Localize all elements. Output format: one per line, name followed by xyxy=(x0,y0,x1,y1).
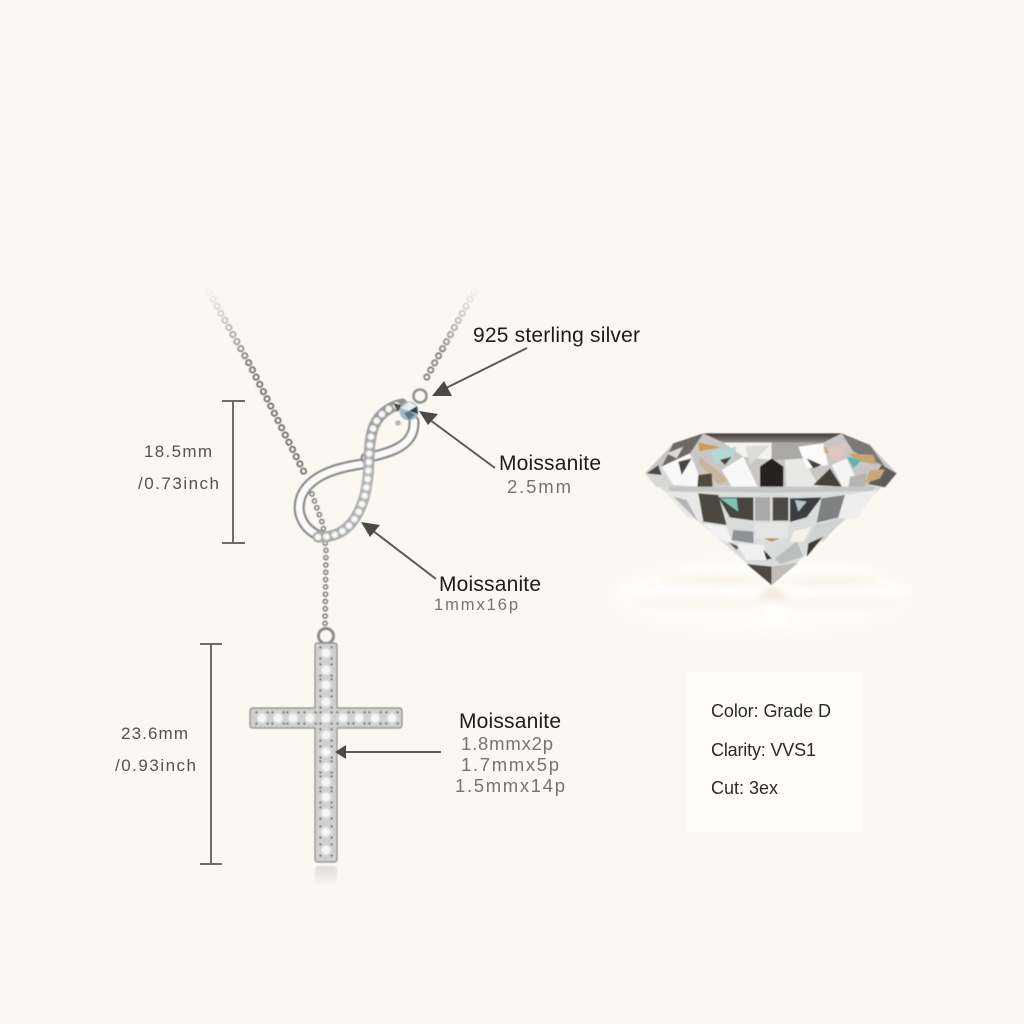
infinity size label xyxy=(138,442,219,493)
dimension bracket: cross height xyxy=(200,644,222,864)
cross size label: 23.6mm xyxy=(121,724,188,743)
pavilion facets xyxy=(665,490,877,585)
infinity size label: /0.73inch xyxy=(138,474,219,493)
label: infinity moissanite: 1mmx16p xyxy=(434,596,518,614)
label: cross moissanite: 1.7mmx5p xyxy=(461,754,559,775)
infinity pendant xyxy=(299,404,414,537)
label: cross moissanite: 1.8mmx2p xyxy=(461,733,553,754)
label: centre moissanite: Moissanite xyxy=(499,452,601,475)
crown base xyxy=(645,433,897,489)
lower chain xyxy=(312,494,326,628)
arrow: infinity stones xyxy=(361,522,436,579)
arrow: centre stone xyxy=(419,411,495,468)
arrow: silver xyxy=(432,348,527,396)
spec panel xyxy=(687,672,862,832)
right chain xyxy=(424,285,478,382)
cross size label: /0.93inch xyxy=(115,756,196,775)
left chain xyxy=(205,285,305,474)
cross size label xyxy=(115,724,196,775)
color grade: Color: Grade D xyxy=(711,701,831,721)
cross reflection xyxy=(315,866,337,886)
label: infinity moissanite: Moissanite xyxy=(439,573,541,596)
diamond xyxy=(645,433,897,585)
moissanite stone band xyxy=(318,404,402,537)
label: cross moissanite: Moissanite xyxy=(459,710,561,733)
cross pendant xyxy=(250,643,402,862)
necklace photo xyxy=(205,285,478,886)
table edge xyxy=(703,433,842,443)
label: cross moissanite xyxy=(455,710,565,796)
diamond reflection xyxy=(615,563,915,631)
label: 925 sterling silver: 925 sterling silver xyxy=(473,324,640,347)
centre moissanite stone xyxy=(393,402,418,426)
label: cross moissanite: 1.5mmx14p xyxy=(455,775,565,796)
cut grade: Cut: 3ex xyxy=(711,778,778,798)
pavilion base xyxy=(658,486,883,585)
clasp ring xyxy=(414,390,426,402)
crown facets xyxy=(645,433,897,491)
label: centre moissanite xyxy=(499,452,601,497)
label: infinity moissanite xyxy=(434,573,541,614)
clarity grade: Clarity: VVS1 xyxy=(711,740,816,760)
polished band xyxy=(299,421,414,536)
arrow: cross stones xyxy=(335,745,441,759)
dimension bracket: infinity height xyxy=(222,401,245,543)
infinity size label: 18.5mm xyxy=(144,442,212,461)
label: centre moissanite: 2.5mm xyxy=(507,476,571,497)
cross ring xyxy=(318,628,334,644)
girdle line xyxy=(668,487,875,493)
